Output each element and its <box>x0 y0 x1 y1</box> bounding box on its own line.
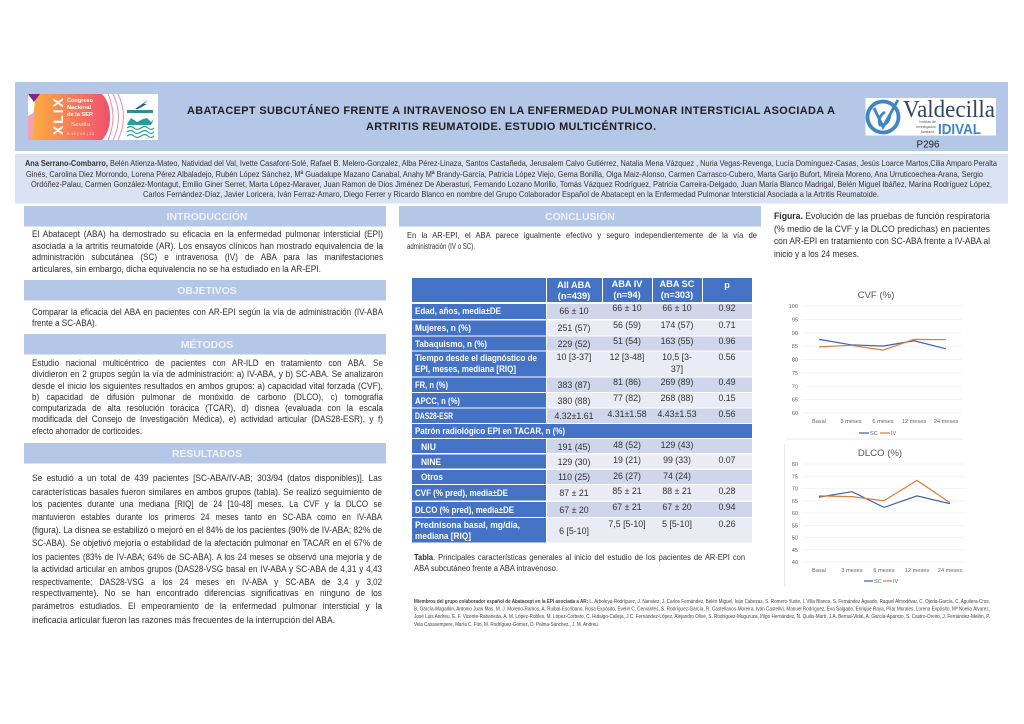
table row: mujeres <box>412 320 752 336</box>
panel: conclusión: CONCLUSIÓN <box>545 210 615 223</box>
table row: NIU: 191 (45) <box>558 442 590 452</box>
table row: tiempo desde el diagnóstico <box>412 352 752 376</box>
table caption <box>414 553 745 573</box>
table header row: (n=439) <box>558 291 590 301</box>
panel: métodos: desde el inicio los siguientes resultados en ambos grupos: a) capacidad vital forzada (CVF), <box>32 381 383 391</box>
congress logo: Nacional <box>67 105 92 111</box>
table row: FR: 383 (87) <box>558 380 590 390</box>
legend: IV <box>893 579 899 585</box>
table header row: p <box>724 280 730 290</box>
figure caption: inicio y a los 24 meses. <box>774 249 859 259</box>
table row: tiempo desde el diagnóstico: EPI, meses, mediana [RIQ] <box>415 364 516 374</box>
table row: FR: 81 (86) <box>613 377 641 387</box>
table row: NINE: 99 (33) <box>663 455 691 465</box>
table row: CVF: 0.28 <box>718 486 736 496</box>
table caption: Tabla. Principales características generales al inicio del estudio de los pacientes de AR-EPI con <box>414 553 745 562</box>
line chart: CVF <box>787 290 963 439</box>
line chart: CVF: 70 <box>792 384 798 390</box>
line chart: DLCO: 80 <box>792 462 798 468</box>
table: características basales <box>412 278 752 542</box>
table row: DLCO: 67 ± 20 <box>559 505 589 515</box>
figure caption: (% medio de la CVF y la DLCO predichas) en pacientes <box>774 224 990 234</box>
table row: DAS28-ESR: DAS28-ESR <box>415 411 453 421</box>
series: IV <box>819 480 950 503</box>
line chart: CVF: 60 <box>792 411 798 417</box>
table row: NINE: NINE <box>421 457 441 467</box>
line chart: CVF: 85 <box>792 344 798 350</box>
authors band: Carlos Fernández-Díaz, Javier Loricera, Iván Ferraz-Amaro, Diego Ferrer y Ricardo Blanco en nombre del Grupo Colaborador Español de Abatacept en la Enfermedad Pulmonar Intersticial Asociada a la Artritis Reumatoide. <box>143 189 879 199</box>
table header row: All ABA <box>557 280 591 290</box>
line chart: DLCO: 50 <box>792 536 798 542</box>
line chart: CVF: 24 meses <box>934 419 958 425</box>
chart title: DLCO: DLCO (%) <box>858 448 902 459</box>
legend <box>864 579 899 585</box>
table row: prednisona <box>412 518 752 542</box>
authors band <box>15 154 1008 204</box>
table row: prednisona: 5 [5-10] <box>662 519 692 529</box>
panel: resultados: SC-ABA). Se objetivó mejoría o estabilidad de la afectación pulmonar en TACAR en el 67% de <box>32 538 382 548</box>
institution logo: Investigación <box>916 125 936 129</box>
figure caption <box>774 211 991 259</box>
table row: CVF: 88 ± 21 <box>662 486 692 496</box>
table row: DAS28-ESR: 4.43±1.53 <box>657 409 697 419</box>
congress logo: · Sevilla · <box>67 122 94 128</box>
table row: tabaquismo: 163 (55) <box>661 336 693 346</box>
figure caption: Figura. Evolución de las pruebas de función respiratoria <box>774 211 991 221</box>
table row: NIU <box>412 439 752 453</box>
collaborators note <box>414 599 990 628</box>
line chart: DLCO: 24 meses <box>938 568 962 574</box>
legend: IV <box>891 431 897 437</box>
table row: prednisona: 0.26 <box>718 519 736 529</box>
line chart: CVF: 95 <box>792 317 798 323</box>
table header row: (n=94) <box>613 290 641 300</box>
table row: patrón radiológico: Patrón radiológico EPI en TACAR, n (%) <box>415 426 565 436</box>
panel: objetivos <box>24 280 386 328</box>
panel: introducción: INTRODUCCIÓN <box>167 210 247 223</box>
table row: prednisona: 6 [5-10] <box>559 526 589 536</box>
header band <box>15 82 1008 151</box>
panel: métodos: dividieron en 2 grupos según la vía de administración: a) IV-ABA, y b) SC-ABA. Se analizaron <box>32 369 383 379</box>
table row: tiempo desde el diagnóstico: 12 [3-48] <box>610 352 644 362</box>
table row: NINE <box>412 454 752 468</box>
panel: resultados: parámetros estudiados. El empeoramiento de la enfermedad pulmonar intersticial y la <box>32 601 383 611</box>
institution logo: Instituto de <box>919 120 936 124</box>
table row: DLCO: 67 ± 21 <box>612 502 642 512</box>
table row: otros: 110 (25) <box>558 472 590 482</box>
panel: resultados: la actividad articular en ambos grupos (DAS28-VSG basal en IV-ABA y SC-ABA de 4,31 y 4,43 <box>32 564 382 574</box>
table row: edad: 66 ± 10 <box>612 303 642 313</box>
panel: resultados: respectivamente). No se han encontrado diferencias significativas en ninguno de los <box>32 588 382 598</box>
panel: métodos: modificada del Consejo de Investigación Médica), e) actividad articular (DAS28-ESR), y f) <box>32 414 383 424</box>
line chart: CVF: 6 meses <box>872 419 894 425</box>
table row: prednisona: Prednisona basal, mg/día, <box>415 520 520 530</box>
title: ABATACEPT SUBCUTÁNEO FRENTE A INTRAVENOSO EN LA ENFERMEDAD PULMONAR INTERSTICIAL ASOCIADA A <box>187 104 835 117</box>
table row: tabaquismo: Tabaquismo, n (%) <box>415 339 487 349</box>
panel: métodos: Estudio nacional multicéntrico de pacientes con AR-ILD en tratamiento con ABA. Se <box>32 358 383 368</box>
line chart: DLCO: 45 <box>792 548 798 554</box>
table row: NINE: 129 (30) <box>558 457 590 467</box>
table row: CVF: 85 ± 21 <box>612 486 642 496</box>
table row: prednisona: mediana [RIQ] <box>415 531 471 541</box>
table row: APCC: 0.15 <box>718 393 736 403</box>
congress logo: XLIX <box>50 97 66 135</box>
table row: otros <box>412 470 752 484</box>
line chart: CVF: 80 <box>792 358 798 364</box>
panel: resultados: los pacientes (83% de IV-ABA; 64% de SC-ABA). A los 24 meses se observó una mejoría y de <box>32 552 382 562</box>
table row: APCC: APCC, n (%) <box>415 396 460 406</box>
table row: DLCO: 67 ± 20 <box>662 502 692 512</box>
table row: otros: 26 (27) <box>613 471 641 481</box>
panel: introducción: articulares, sin embargo, dicha equivalencia no se ha estudiado en la AR-EPI. <box>32 264 321 274</box>
table row: FR: 269 (89) <box>661 377 693 387</box>
line chart: DLCO: 70 <box>792 486 798 492</box>
table row: edad: 0.92 <box>718 303 736 313</box>
table row: prednisona: 7,5 [5-10] <box>608 519 646 529</box>
congress logo: de la SER <box>67 112 93 118</box>
line chart: DLCO: Basal <box>812 568 826 574</box>
line chart: CVF: 12 meses <box>902 419 926 425</box>
title: ARTRITIS REUMATOIDE. ESTUDIO MULTICÉNTRICO. <box>366 120 656 133</box>
panel: métodos <box>24 334 386 436</box>
table row: mujeres: 174 (57) <box>661 320 693 330</box>
institution logo <box>866 97 996 138</box>
table row: NIU: 48 (52) <box>613 440 641 450</box>
institution logo: IDIVAL <box>938 121 981 138</box>
panel: objetivos: frente a SC-ABA). <box>32 318 97 328</box>
line chart: DLCO: 75 <box>792 474 798 480</box>
panel: conclusión: En la AR-EPI, el ABA parece igualmente efectivo y seguro independientemente de la vía de <box>407 230 757 240</box>
table row: mujeres: 251 (57) <box>558 323 590 333</box>
line chart: CVF: 100 <box>789 304 798 310</box>
table row: FR <box>412 377 752 392</box>
table row: CVF: CVF (% pred), media±DE <box>415 488 508 498</box>
congress logo: Congreso <box>67 98 94 104</box>
table row: APCC: 77 (82) <box>613 393 641 403</box>
legend: SC <box>874 579 882 585</box>
table row: FR: FR, n (%) <box>415 380 448 390</box>
panel: métodos: MÉTODOS <box>181 338 233 351</box>
panel: resultados: respectivamente; DAS28-VSG a los 24 meses en IV-ABA y SC-ABA de 3,4 y 3,02 <box>32 577 382 587</box>
table row: tabaquismo: 229 (52) <box>558 339 590 349</box>
line chart: CVF: 75 <box>792 371 798 377</box>
title <box>187 104 835 133</box>
institution logo: Sanitaria <box>921 130 934 134</box>
series: SC <box>819 339 946 349</box>
table row: patrón radiológico <box>412 424 752 438</box>
panel: conclusión <box>399 206 761 251</box>
line chart: DLCO: 12 meses <box>905 568 929 574</box>
table row: edad: Edad, años, media±DE <box>415 306 501 316</box>
table row: edad: 66 ± 10 <box>662 303 692 313</box>
table row: otros: Otros <box>421 472 443 482</box>
panel: resultados: ineficacia articular fueron las razones más frecuentes de la interrupción del ABA. <box>32 615 335 625</box>
panel: métodos: efecto ahorrador de corticoides. <box>32 426 142 436</box>
congress logo: 9-12 | 05 | 23 <box>67 132 94 136</box>
panel: métodos: computarizada de alta resolución torácica (TCAR), d) disnea (evaluada con la escala <box>32 403 384 413</box>
series: SC <box>819 492 950 507</box>
line chart: DLCO: 3 meses <box>841 568 863 574</box>
collaborators note: Vela Casasempere, María C. Fito, M. Rodríguez-Gómez, D. Palma-Sánchez,, J. M. Andreu. <box>414 622 599 628</box>
table row: NINE: 0.07 <box>718 455 736 465</box>
table row: APCC: 380 (88) <box>558 396 590 406</box>
table row: tabaquismo <box>412 336 752 350</box>
panel: introducción: asociada a la artritis reumatoide (AR). Los ensayos clínicos han mostrado equivalencia de la <box>32 241 384 251</box>
table row: edad <box>412 303 752 319</box>
table row: tiempo desde el diagnóstico: 0.56 <box>718 352 736 362</box>
panel: introducción <box>24 206 386 274</box>
panel: conclusión: administración (IV o SC). <box>407 242 475 251</box>
table row: tiempo desde el diagnóstico: 37] <box>671 364 683 374</box>
line chart: DLCO: 6 meses <box>873 568 895 574</box>
panel: métodos: b) capacidad de difusión pulmonar de monóxido de carbono (DLCO), c) tomografía <box>32 392 384 402</box>
panel: resultados <box>24 443 386 625</box>
table row: FR: 0.49 <box>718 377 736 387</box>
panel: resultados: mantuvieron estables durante los primeros 24 meses tanto en SC-ABA como en IV-ABA <box>32 512 383 522</box>
line chart: CVF: 3 meses <box>840 419 862 425</box>
panel: objetivos: Comparar la eficacia del ABA en pacientes con AR-EPI según la vía de administración (IV-ABA <box>32 307 384 317</box>
table row: tabaquismo: 51 (54) <box>613 336 641 346</box>
line chart: CVF: 65 <box>792 398 798 404</box>
line chart: DLCO: 40 <box>792 560 798 566</box>
table header row: ABA SC <box>660 279 695 289</box>
table row: tiempo desde el diagnóstico: 10 [3-37] <box>557 352 591 362</box>
table header row: ABA IV <box>612 279 643 289</box>
panel: resultados: RESULTADOS <box>172 449 242 460</box>
figure caption: con AR-EPI en tratamiento con SC-ABA frente a IV-ABA al <box>774 236 990 246</box>
table header row: (n=303) <box>661 290 693 300</box>
panel: resultados: (figura). La disnea se estabilizó o mejoró en el 84% de los pacientes (90% de IV-ABA; 82% de <box>32 525 382 535</box>
panel: introducción: administración subcutánea (SC) e intravenosa (IV) de ABA para las manifestaciones <box>32 252 383 262</box>
panel: introducción: El Abatacept (ABA) ha demostrado su eficacia en la enfermedad pulmonar intersticial (EPI) <box>32 229 383 239</box>
table row: DLCO <box>412 502 752 517</box>
table row: DLCO: 0.94 <box>718 502 736 512</box>
table header row <box>412 278 752 302</box>
table row: NINE: 19 (21) <box>613 455 641 465</box>
line chart: CVF: Basal <box>812 419 826 425</box>
series: IV <box>819 339 946 350</box>
table row: tabaquismo: 0.96 <box>718 336 736 346</box>
table row: edad: 66 ± 10 <box>559 306 589 316</box>
table row: APCC <box>412 393 752 408</box>
panel: resultados: Se estudió a un total de 439 pacientes [SC-ABA/IV-AB; 303/94 (datos disponibles)]. Las <box>32 473 382 483</box>
poster number: P296 <box>917 140 940 150</box>
table row: CVF: 87 ± 21 <box>559 488 589 498</box>
line chart: DLCO: 60 <box>792 511 798 517</box>
line chart: DLCO: 55 <box>792 523 798 529</box>
table row: DAS28-ESR: 4.31±1.58 <box>607 409 647 419</box>
table row: DLCO: DLCO (% pred), media±DE <box>415 505 514 515</box>
congress logo <box>28 94 158 140</box>
table row: NIU: 129 (43) <box>661 440 693 450</box>
line chart: CVF: 90 <box>792 331 798 337</box>
table row: DAS28-ESR <box>412 408 752 423</box>
line chart: DLCO: 65 <box>792 499 798 505</box>
table row: otros: 74 (24) <box>663 471 691 481</box>
table row: CVF <box>412 485 752 500</box>
panel: resultados: los pacientes durante una mediana [RIQ] de 24 [10-48] meses. La CVF y la DLCO se <box>32 499 382 509</box>
table row: DAS28-ESR: 0.56 <box>718 409 736 419</box>
table row: mujeres: 56 (59) <box>613 320 641 330</box>
chart title: CVF: CVF (%) <box>858 290 894 301</box>
legend: SC <box>870 431 878 437</box>
table row: APCC: 268 (88) <box>661 393 693 403</box>
table caption: ABA subcutáneo frente a ABA intravenoso. <box>414 564 558 573</box>
legend <box>859 431 897 437</box>
institution logo: Valdecilla <box>903 97 995 123</box>
table row: NIU: NIU <box>421 442 436 452</box>
table row: tiempo desde el diagnóstico: 10,5 [3- <box>662 352 692 362</box>
panel: resultados: características basales fueron similares en ambos grupos (tabla). Se realizó seguimiento de <box>32 487 382 497</box>
table row: tiempo desde el diagnóstico: Tiempo desde el diagnóstico de <box>415 353 537 363</box>
line chart: DLCO <box>784 444 965 587</box>
table row: DAS28-ESR: 4.32±1.61 <box>554 411 594 421</box>
panel: objetivos: OBJETIVOS <box>177 286 237 297</box>
table row: mujeres: Mujeres, n (%) <box>415 323 471 333</box>
table row: mujeres: 0.71 <box>718 320 736 330</box>
